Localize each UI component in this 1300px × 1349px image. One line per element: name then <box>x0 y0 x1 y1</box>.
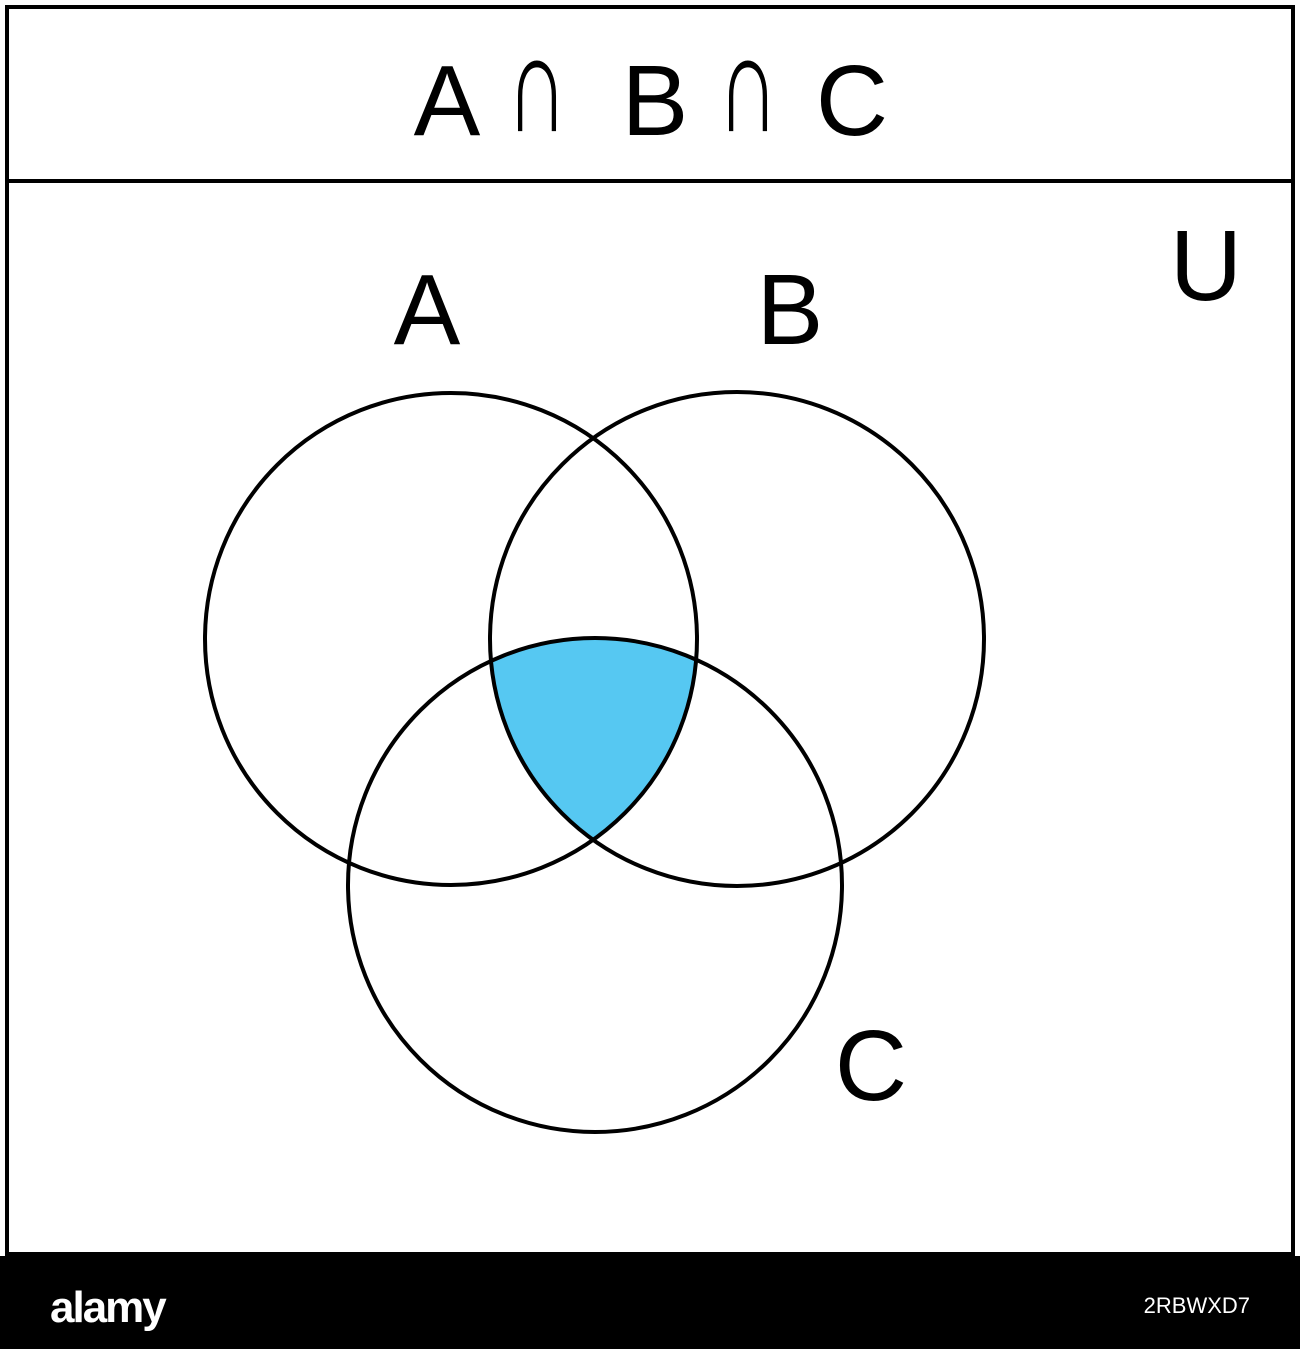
title: ∩ <box>717 4 779 161</box>
title <box>414 4 888 161</box>
footer bar: alamy <box>50 1283 167 1332</box>
title: ∩ <box>506 4 568 161</box>
title: C <box>816 45 888 157</box>
footer bar <box>0 1256 1300 1349</box>
label U: U <box>1170 210 1242 322</box>
label A: A <box>394 254 461 366</box>
footer bar: 2RBWXD7 <box>1144 1293 1250 1318</box>
label C: C <box>835 1010 907 1122</box>
label B: B <box>757 254 823 366</box>
title: A <box>414 45 481 157</box>
circle B <box>490 392 984 886</box>
title: B <box>622 45 688 157</box>
shaded intersection A∩B∩C <box>493 640 694 838</box>
circle C <box>348 638 842 1132</box>
circle A <box>205 393 697 885</box>
